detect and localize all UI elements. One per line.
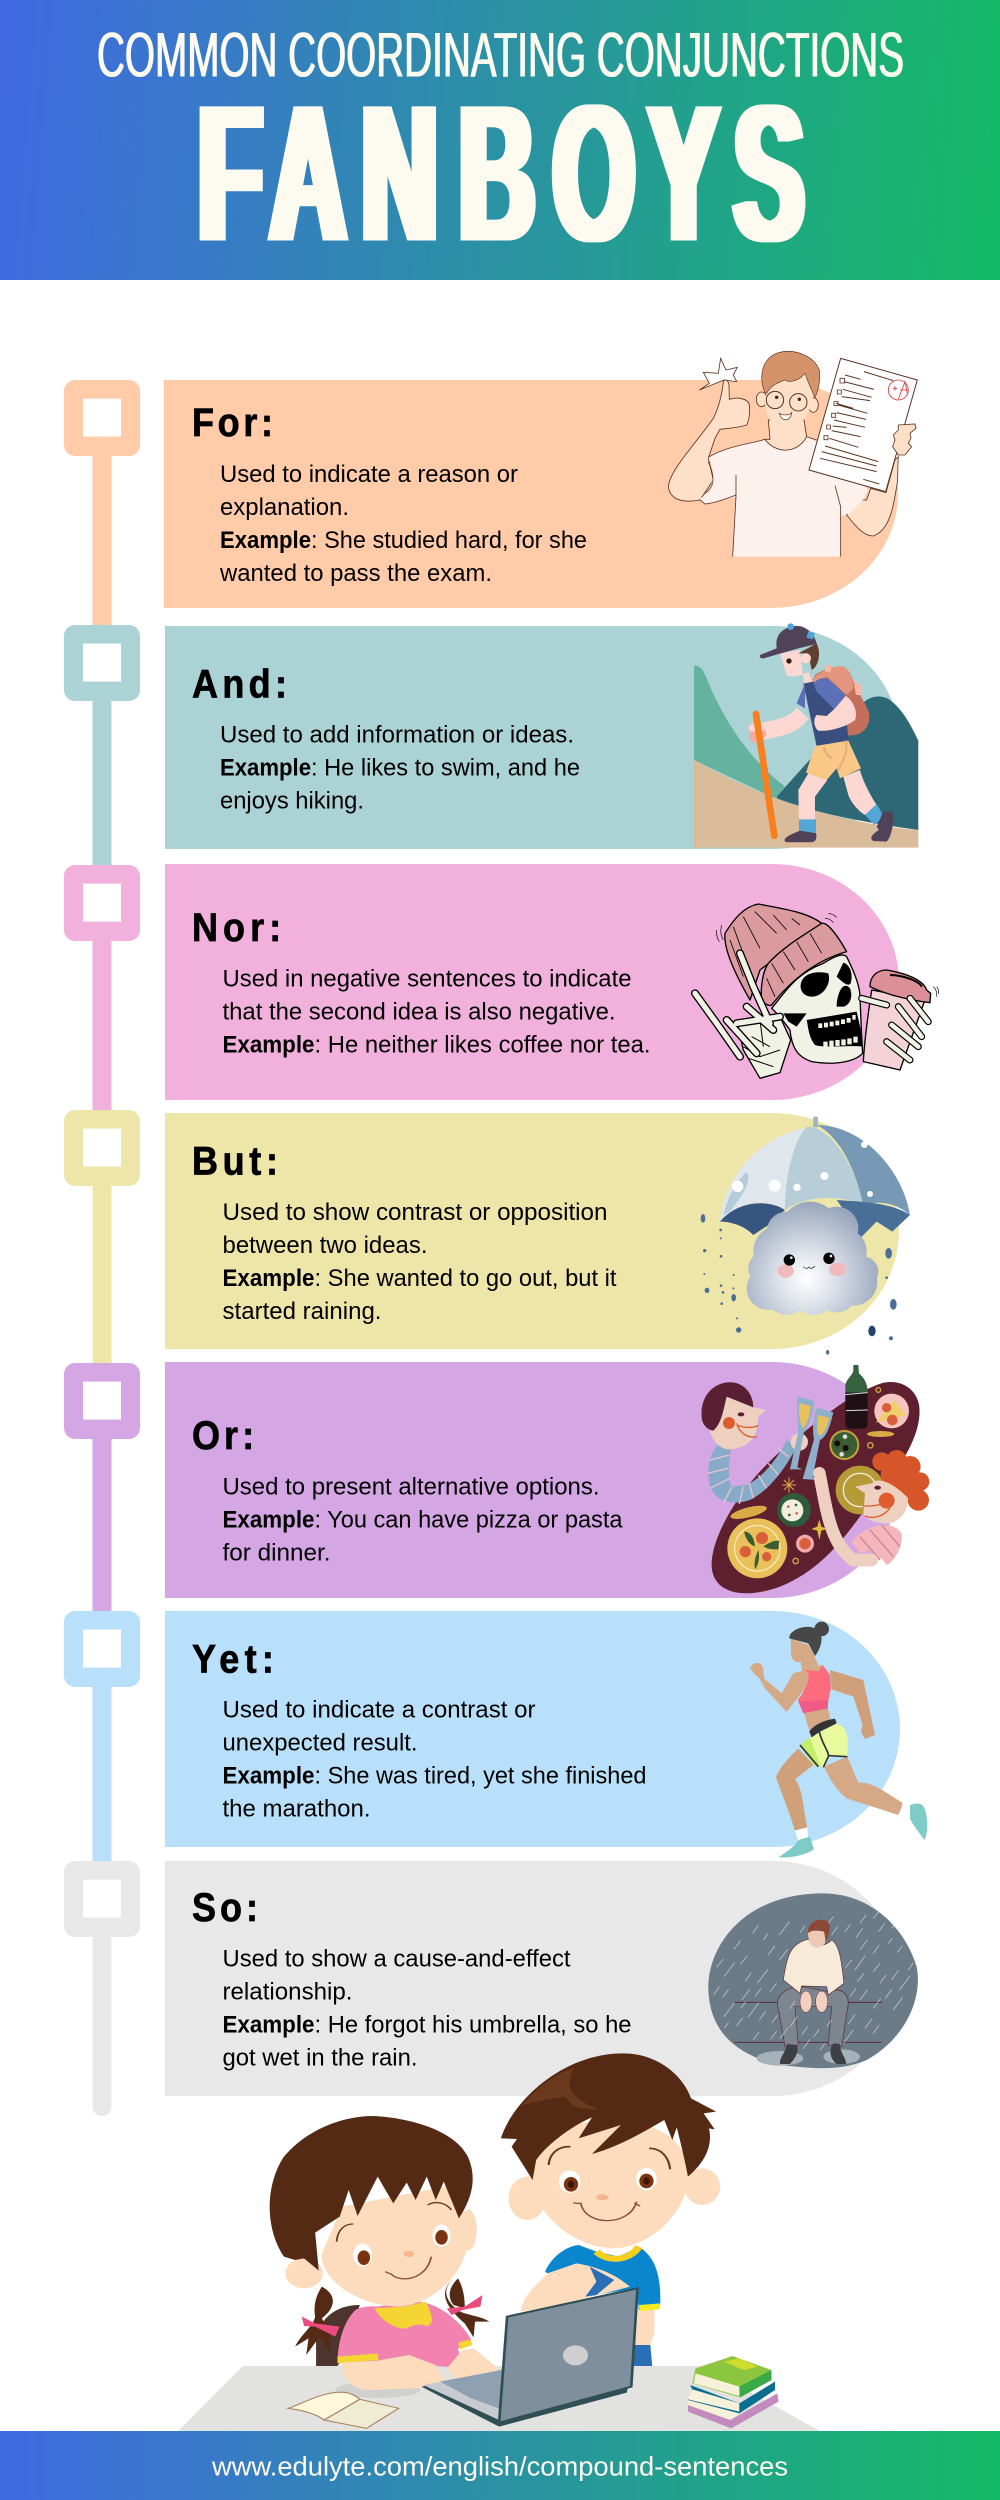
- icon: hiker: [694, 623, 918, 848]
- text block: Or: Used to present alternative options.: [222, 1474, 600, 1500]
- text block: For: [219, 461, 587, 587]
- text block: Or: for dinner.: [222, 1540, 330, 1566]
- panel: And: [165, 623, 918, 849]
- heading: Nor: Nor:: [192, 906, 281, 950]
- text block: But: between two ideas.: [222, 1232, 428, 1259]
- footer banner: [0, 2431, 1000, 2500]
- text block: But: started raining.: [222, 1298, 382, 1325]
- icon: cloud under umbrella: [701, 1117, 910, 1355]
- icon: sad man sitting in rain: [708, 1893, 918, 2068]
- text block: So: [222, 1946, 632, 2072]
- heading: And: And:: [192, 663, 287, 707]
- footer url: www.edulyte.com/english/compound-sentences: [211, 2452, 788, 2482]
- text block: Or: Example: [222, 1506, 314, 1534]
- header banner: [0, 0, 1000, 283]
- panel: So: [165, 1861, 918, 2096]
- text block: Yet: : She was tired, yet she finished: [314, 1762, 646, 1790]
- text block: So: Example: [222, 2012, 314, 2038]
- heading: But: But:: [192, 1140, 278, 1184]
- text block: And: : He likes to swim, and he: [311, 754, 580, 782]
- text block: Or: : You can have pizza or pasta: [314, 1506, 623, 1534]
- icon: couple sharing pizza and wine: [702, 1365, 929, 1593]
- text block: Nor: that the second idea is also negative.: [222, 998, 616, 1026]
- text block: And: Used to add information or ideas.: [220, 722, 574, 748]
- panel: For: [164, 351, 917, 608]
- text block: And: Example: [220, 754, 311, 782]
- text block: So: Used to show a cause-and-effect: [222, 1946, 571, 1972]
- text block: Nor: [222, 966, 650, 1058]
- text block: For: explanation.: [220, 494, 349, 521]
- text block: And: [220, 722, 580, 814]
- text block: Yet: Example: [222, 1762, 314, 1790]
- text block: For: wanted to pass the exam.: [219, 560, 492, 587]
- panel: Nor: [165, 864, 939, 1100]
- text block: So: relationship.: [222, 1978, 352, 2006]
- text block: For: Used to indicate a reason or: [220, 461, 518, 488]
- heading: So: So:: [192, 1886, 258, 1930]
- text block: Nor: : He neither likes coffee nor tea.: [314, 1032, 650, 1058]
- icon: runner: [750, 1622, 927, 1858]
- text block: Yet: unexpected result.: [222, 1730, 418, 1756]
- laptop: [421, 2288, 638, 2427]
- text block: And: enjoys hiking.: [220, 788, 364, 814]
- text block: So: got wet in the rain.: [222, 2044, 418, 2072]
- text block: Nor: Used in negative sentences to indicate: [222, 966, 632, 992]
- icon: student with test paper: [668, 351, 917, 557]
- panel: Or: [165, 1362, 929, 1598]
- text block: For: : She studied hard, for she: [311, 527, 587, 554]
- text block: But: [222, 1199, 617, 1325]
- panel: Yet: [165, 1611, 900, 1847]
- heading: Or: Or:: [192, 1414, 254, 1458]
- text block: So: : He forgot his umbrella, so he: [314, 2012, 632, 2038]
- heading: Yet: Yet:: [192, 1638, 274, 1682]
- text block: Yet: the marathon.: [222, 1796, 370, 1822]
- stack of books: [688, 2356, 779, 2428]
- text block: But: : She wanted to go out, but it: [314, 1265, 617, 1292]
- boy: [501, 2053, 720, 2366]
- icon: skull with beanie and coffee: [695, 904, 939, 1078]
- text block: Yet: [222, 1696, 646, 1822]
- text block: But: Example: [222, 1265, 314, 1292]
- open book: [288, 2392, 399, 2428]
- text block: Or: [222, 1474, 623, 1566]
- girl: [270, 2116, 489, 2368]
- text block: Yet: Used to indicate a contrast or: [222, 1696, 536, 1724]
- heading: For: For:: [192, 401, 273, 445]
- illustration: two kids with laptop: [178, 2053, 821, 2432]
- table: [178, 2366, 821, 2432]
- timeline with square markers: [64, 380, 140, 2116]
- text block: Nor: Example: [222, 1032, 314, 1058]
- text block: For: Example: [220, 527, 311, 554]
- panel: But: [165, 1113, 910, 1355]
- text block: But: Used to show contrast or opposition: [222, 1199, 608, 1226]
- title: FANBOYS: FANBOYS: [198, 65, 804, 283]
